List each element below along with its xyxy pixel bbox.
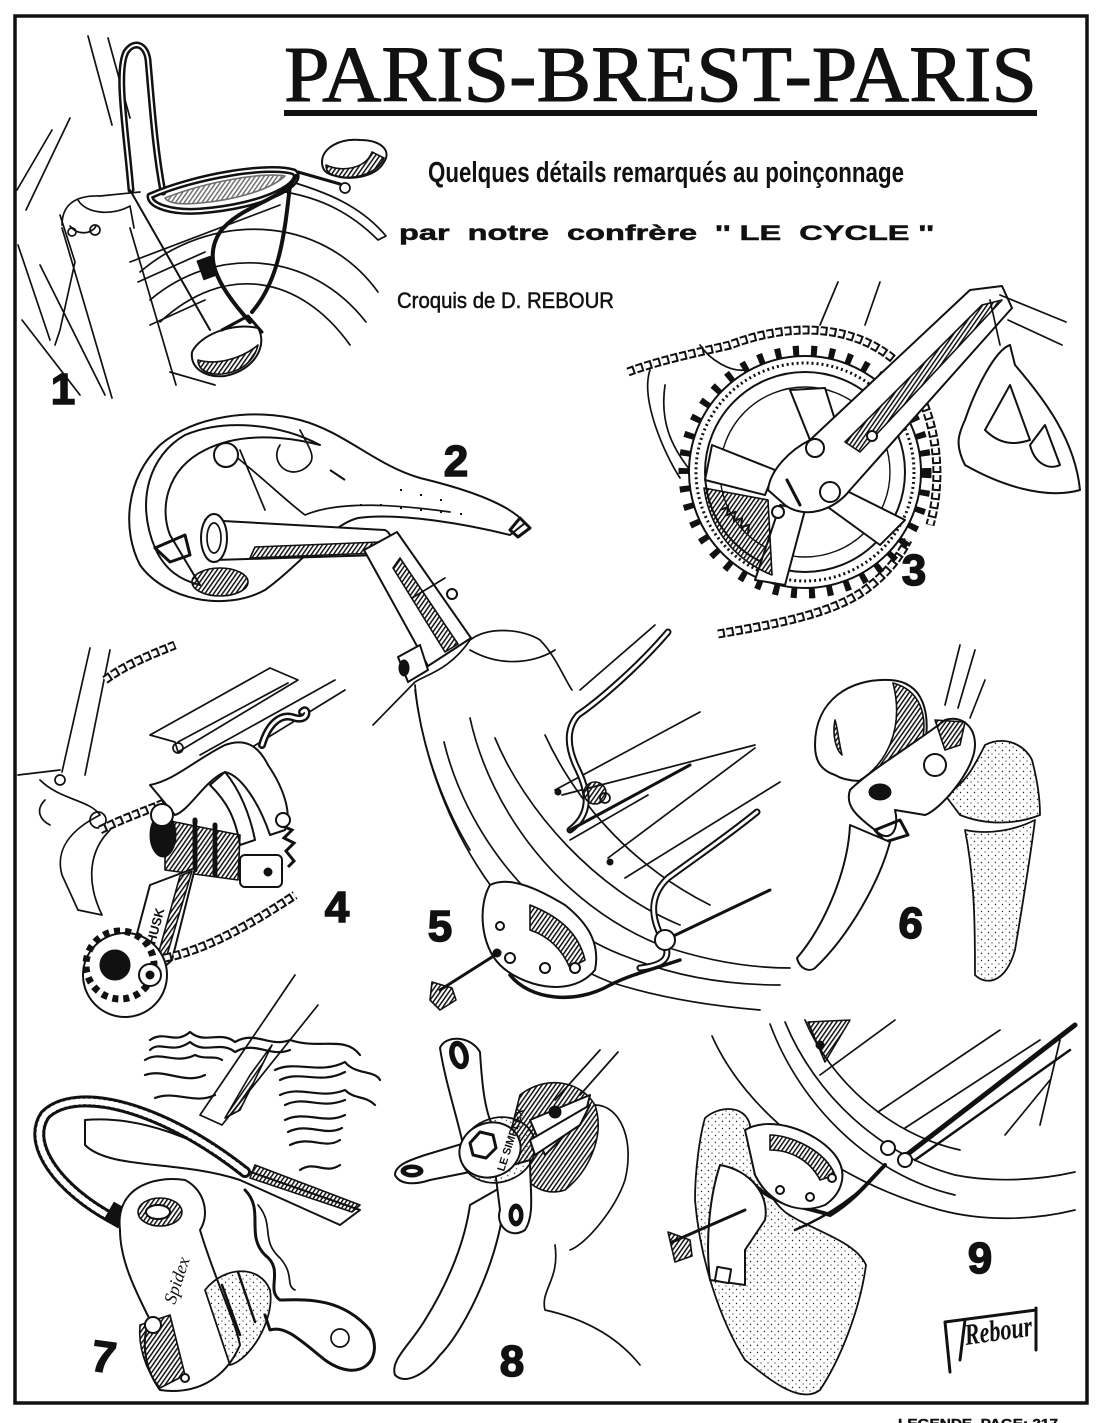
wing nut wings (440, 1039, 495, 1140)
spokes (820, 1020, 1060, 1135)
subtitle: Quelques détails remarqués au poinçonnage (428, 157, 904, 189)
number 7: 7 (88, 1332, 119, 1383)
bell (815, 680, 927, 781)
wire loop (122, 45, 163, 192)
cage arm (130, 868, 195, 980)
pedal (990, 295, 1066, 345)
derailleur bracket (150, 742, 288, 835)
spider (720, 387, 890, 557)
figure 8: wing-nut brake lever (394, 1039, 640, 1379)
signature: Rebour: Rebour (962, 1310, 1035, 1352)
wheel arcs (712, 1020, 1075, 1218)
upper lamp (322, 140, 387, 178)
cable loop (39, 1101, 245, 1218)
chain (628, 330, 937, 525)
lamp tube (205, 520, 391, 560)
figure 4: rear derailleur: HUSK (143, 906, 168, 946)
cables (213, 176, 296, 322)
cables and hand (544, 1050, 640, 1365)
tyre and rim arcs (415, 690, 790, 1010)
upper chain (105, 645, 175, 680)
jockey wheel (83, 933, 167, 1017)
saddle outline (129, 414, 525, 601)
handlebar tape (965, 820, 1035, 981)
fork end (483, 882, 596, 987)
number 1: 1 (51, 365, 75, 414)
number 6: 6 (896, 898, 926, 949)
credit: Croquis de D. REBOUR (397, 288, 614, 313)
upper stay (569, 632, 668, 830)
clamp (510, 1083, 598, 1192)
crank arm (768, 286, 1012, 512)
number 9: 9 (968, 1234, 992, 1283)
chain stays (150, 668, 345, 770)
mudflap (695, 1109, 866, 1395)
frame tube (200, 975, 318, 1125)
second wing (530, 1105, 590, 1155)
clamp (849, 719, 975, 836)
lower lamp (192, 327, 261, 376)
wing nut hub (451, 1107, 545, 1193)
title: PARIS-BREST-PARIS (284, 32, 1037, 119)
rails (225, 430, 450, 515)
inner ring teeth (704, 488, 772, 575)
chainring (684, 351, 926, 593)
figure 7: brake lever with cable loop: Spidex (160, 1254, 194, 1306)
figure 4: rear derailleur (18, 645, 345, 1017)
hood (945, 741, 1040, 822)
lower stay (640, 812, 757, 968)
spokes (555, 625, 780, 878)
number 3: 3 (902, 546, 926, 595)
saddle perforations (330, 470, 462, 514)
brake lever (394, 1185, 505, 1379)
axle (672, 1210, 745, 1242)
taped hand (205, 1271, 271, 1365)
figure 6: bell on brake lever (797, 645, 1040, 981)
signature: Rebour (945, 1308, 1036, 1372)
barrel (165, 820, 240, 880)
axle (440, 952, 500, 990)
brake body (120, 1179, 240, 1391)
number 5: 5 (428, 902, 452, 951)
figure 7: brake lever with cable loop (39, 975, 380, 1391)
seat post (364, 532, 471, 666)
figure 1: lamps with wire carrier on seat tube (17, 36, 387, 398)
number 8: 8 (500, 1337, 524, 1386)
figure 2: saddle with lamp and seat post (129, 414, 572, 850)
hand / sleeve (373, 631, 572, 850)
fork end (745, 1124, 842, 1209)
lower chain (245, 1190, 374, 1370)
cable hook (262, 710, 306, 745)
handlebar curve (85, 1119, 360, 1225)
figure 9: wheel, stay and mudflap (668, 1020, 1075, 1395)
oval carrier (150, 169, 296, 211)
number 2: 2 (444, 437, 468, 486)
cassette (145, 1032, 380, 1170)
figure 3: chainset and pedal (628, 282, 1080, 634)
lower chain (165, 895, 295, 958)
figure 5: mudguard and rack stays at wheel (415, 625, 790, 1010)
source line: par notre confrère '' LE CYCLE '' (399, 222, 934, 245)
title underline (284, 110, 1037, 116)
figure 8: wing-nut brake lever: LE SIMPLEX (495, 1106, 527, 1173)
number 4: 4 (325, 883, 350, 932)
stay (900, 1025, 1075, 1160)
brake lever (797, 825, 890, 970)
